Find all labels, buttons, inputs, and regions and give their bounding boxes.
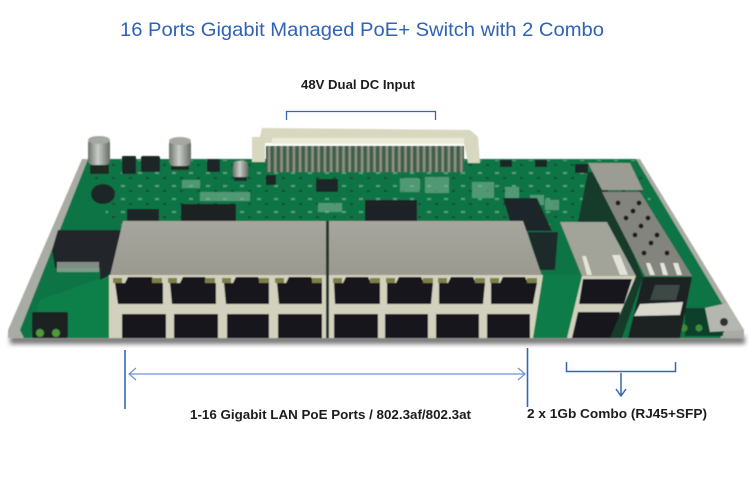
transformer module <box>52 230 122 280</box>
combo RJ45 top port <box>579 279 632 304</box>
component specks <box>88 160 660 225</box>
inductors and small parts <box>91 156 588 221</box>
RJ45 ports bottom row <box>122 314 530 338</box>
right LEDs and mount <box>680 303 744 336</box>
block seam <box>326 221 329 338</box>
line: right edge of LAN ports <box>526 348 528 407</box>
SFP latch <box>634 302 683 316</box>
board shadow <box>10 336 745 344</box>
port block right: metal top <box>329 221 542 276</box>
silkscreen pads <box>182 177 559 212</box>
chip left <box>181 204 236 221</box>
SFP lower slot detail <box>650 285 680 300</box>
combo green gap <box>533 275 582 338</box>
chip centre <box>365 200 417 221</box>
chip right <box>503 198 552 231</box>
arrow: LAN port span <box>129 368 525 380</box>
left LEDs <box>32 312 68 338</box>
photo: switch circuit board <box>8 128 745 344</box>
pin row on transformer <box>57 262 99 272</box>
combo RJ45 clips <box>582 255 628 275</box>
small capacitor <box>233 161 248 181</box>
SFP cage dark side <box>578 172 643 338</box>
combo RJ45 face <box>567 276 636 338</box>
lighter board area <box>30 275 110 338</box>
combo RJ45 metal top <box>560 222 636 276</box>
SFP cage top <box>588 163 643 190</box>
label: LAN ports: 1-16 Gigabit LAN PoE Ports / 802.3af/802.3at <box>190 407 472 422</box>
DC input connector <box>252 128 480 172</box>
port LEDs <box>113 278 537 283</box>
SFP face <box>628 277 692 338</box>
bracket: combo ports <box>566 362 676 372</box>
line: left edge of LAN ports <box>124 350 126 409</box>
dark component near combo <box>528 232 558 270</box>
SFP clips <box>646 263 682 275</box>
board metal rim <box>8 159 744 338</box>
port face <box>109 275 543 338</box>
SFP cage holes <box>616 201 669 255</box>
bracket: DC input <box>286 112 436 120</box>
combo RJ45 bottom port <box>572 312 620 338</box>
green circuit board <box>20 159 732 338</box>
label: 48V dual DC input: 48V Dual DC Input <box>301 77 416 92</box>
RJ45 ports top row <box>115 277 537 304</box>
port block left: metal top <box>110 221 326 276</box>
title: 16 Ports Gigabit Managed PoE+ Switch with 2 Combo <box>120 19 604 41</box>
arrow: combo down <box>616 373 626 396</box>
capacitor left <box>88 136 110 174</box>
label: combo ports: 2 x 1Gb Combo (RJ45+SFP) <box>527 406 707 421</box>
capacitor right <box>169 137 191 170</box>
SFP cage perforated <box>602 192 692 276</box>
